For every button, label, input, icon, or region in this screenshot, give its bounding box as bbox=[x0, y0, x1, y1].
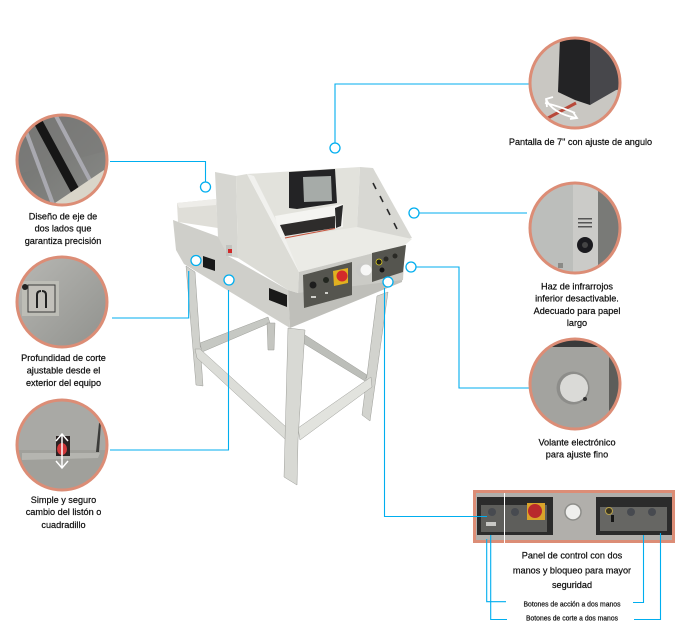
marker: shaft bbox=[200, 182, 210, 192]
machine body bbox=[173, 167, 412, 328]
marker: top bbox=[330, 143, 340, 153]
caption: strip: cambio del listón o bbox=[26, 507, 101, 517]
caption: wheel: Volante electrónico bbox=[538, 438, 616, 448]
caption: depth: ajustable desde el bbox=[27, 366, 100, 376]
left control panel bbox=[303, 262, 352, 308]
caption: depth: exterior del equipo bbox=[26, 378, 101, 388]
fine adjust knob bbox=[565, 504, 581, 520]
caption: infrared: Adecuado para papel bbox=[534, 306, 620, 316]
panel pointer bbox=[470, 516, 487, 518]
caption: control panel: Panel de control con dos bbox=[522, 550, 623, 560]
callout photo: strip change bbox=[14, 397, 110, 495]
caption: infrared: inferior desactivable. bbox=[535, 294, 619, 304]
machine stand bbox=[186, 266, 388, 485]
adjustment knob bbox=[356, 263, 372, 277]
marker: wheel bbox=[406, 262, 416, 272]
marker: strip bbox=[224, 275, 234, 285]
caption: control panel: seguridad bbox=[552, 580, 592, 590]
right buttons bbox=[596, 497, 672, 535]
cutting throat bbox=[275, 204, 343, 238]
white panel divider bbox=[504, 493, 506, 543]
vents bbox=[203, 256, 215, 271]
right control panel bbox=[372, 245, 406, 282]
control panel photo bbox=[473, 490, 675, 543]
touch screen bbox=[289, 169, 337, 209]
side emergency switch bbox=[226, 245, 232, 256]
label: action buttons: Botones de acción a dos manos bbox=[524, 600, 621, 608]
caption: shaft: garantiza precisión bbox=[25, 236, 101, 246]
connector lines bbox=[110, 84, 530, 516]
callout photo: two-sided shaft bbox=[16, 114, 108, 206]
callout photo: infrared bbox=[528, 182, 622, 274]
caption: control panel: manos y bloqueo para mayor bbox=[513, 566, 631, 576]
bracket: action buttons bbox=[487, 539, 506, 602]
bracket: cut buttons right bbox=[634, 533, 660, 620]
left buttons bbox=[477, 497, 553, 535]
callout photo: cutting depth bbox=[14, 254, 110, 350]
slot marks on side panel bbox=[373, 183, 397, 229]
caption: shaft: Diseño de eje de bbox=[29, 212, 97, 222]
caption: shaft: dos lados que bbox=[35, 224, 91, 234]
caption: infrared: largo bbox=[567, 318, 587, 328]
marker: depth bbox=[191, 256, 201, 266]
illustration: paper cutting machine bbox=[173, 167, 412, 485]
marker: panel bbox=[383, 277, 393, 287]
caption: wheel: para ajuste fino bbox=[546, 450, 608, 460]
caption: depth: Profundidad de corte bbox=[21, 353, 106, 363]
callout photo: screen angle bbox=[527, 35, 623, 131]
marker: infrared bbox=[409, 208, 419, 218]
caption: strip: Simple y seguro bbox=[31, 495, 96, 505]
bracket: action buttons right bbox=[633, 535, 644, 602]
bracket: cut buttons bbox=[491, 535, 507, 620]
caption: infrared: Haz de infrarrojos bbox=[541, 282, 613, 292]
caption: strip: cuadradillo bbox=[41, 520, 86, 530]
callout photo: electronic wheel bbox=[527, 336, 624, 432]
label: cut buttons: Botones de corte a dos manos bbox=[526, 614, 618, 622]
caption: screen: Pantalla de 7" con ajuste de angulo bbox=[509, 137, 652, 147]
